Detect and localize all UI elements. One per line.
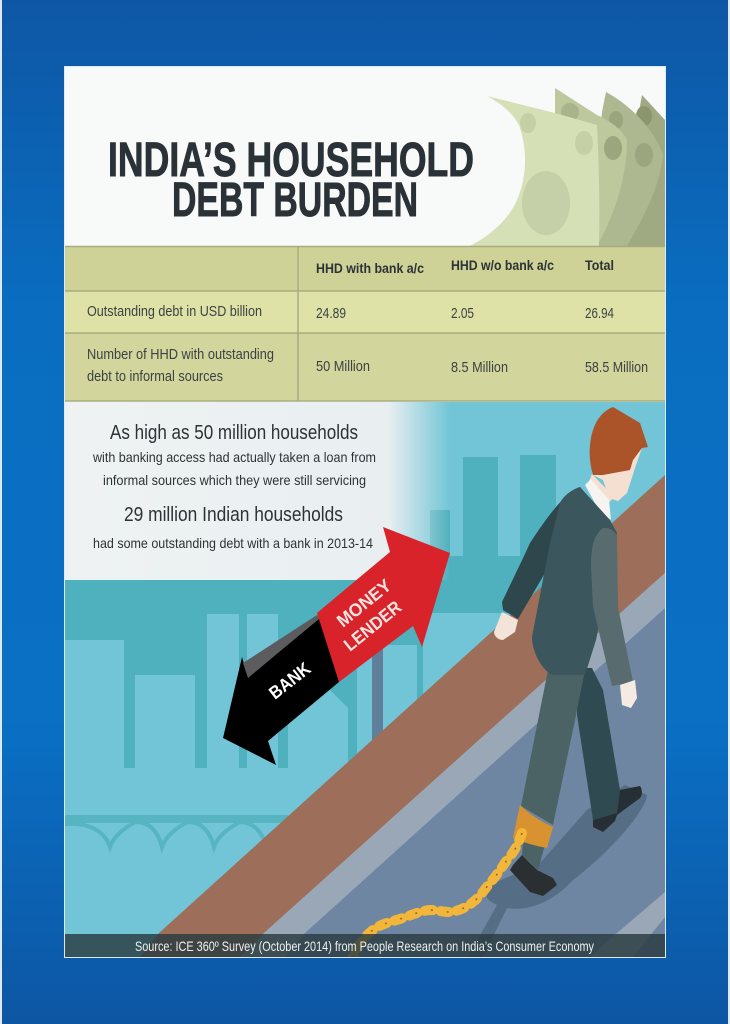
- table row: outstanding debt: [87, 303, 614, 322]
- text backdrop: [65, 402, 450, 580]
- rear leg: [577, 668, 620, 820]
- table header row: HHD with bank a/c: [316, 260, 424, 276]
- statement: 50 million households: informal sources which they were still servicing: [103, 472, 366, 488]
- table row: households with informal debt: debt to informal sources: [87, 368, 223, 385]
- background skyline: [65, 455, 560, 768]
- slope: road: [285, 608, 665, 957]
- statement: 29 million households: had some outstanding debt with a bank in 2013-14: [93, 535, 373, 551]
- front shoe: [510, 855, 557, 896]
- front ankle: [522, 840, 545, 870]
- arrow shadow stripe: [243, 615, 320, 678]
- jacket: [532, 487, 617, 675]
- face: [593, 448, 642, 501]
- man: [494, 407, 648, 896]
- table header row: HHD w/o bank a/c: [451, 257, 554, 273]
- statement: 50 million households: [92, 422, 376, 488]
- road edge stripe: [616, 892, 665, 934]
- debt table: [65, 246, 665, 401]
- table row: outstanding debt: Outstanding debt in USD billion: [87, 303, 262, 320]
- title: [108, 134, 474, 227]
- title: INDIA’S HOUSEHOLD: [108, 134, 474, 187]
- title: DEBT BURDEN: [172, 174, 418, 227]
- illustration scene: [65, 402, 665, 957]
- label: money lender: LENDER: [340, 597, 405, 655]
- slope: grey kerb: [240, 573, 665, 957]
- source bar: [65, 934, 665, 957]
- table row: outstanding debt: 24.89: [316, 305, 346, 322]
- label: bank: BANK: [265, 658, 314, 703]
- statement: 50 million households: As high as 50 million households: [110, 422, 358, 444]
- front hand: [620, 680, 637, 708]
- table row: households with informal debt: [87, 346, 648, 385]
- rear shoe: [593, 786, 642, 832]
- statement: 29 million households: [93, 504, 373, 551]
- statement: 29 million households: 29 million Indian households: [124, 504, 343, 526]
- label: money lender: MONEY: [333, 575, 395, 631]
- statement: 50 million households: with banking access had actually taken a loan from: [92, 449, 376, 465]
- man's shadow: [481, 785, 647, 934]
- front arm: [591, 528, 633, 686]
- rear hand: [494, 612, 518, 640]
- neck: [589, 474, 612, 502]
- bridge: [65, 819, 288, 847]
- table header row: [316, 257, 614, 276]
- source bar: Source: ICE 360º Survey (October 2014) from People Research on India’s Consumer Economy: [135, 938, 594, 954]
- label: money lender: [336, 578, 402, 652]
- hair: [590, 407, 648, 475]
- arrow: bank: [223, 618, 339, 765]
- shirt collar: [585, 479, 611, 520]
- leg chain: [353, 833, 522, 957]
- table row: outstanding debt: 26.94: [585, 305, 614, 322]
- table row: outstanding debt: 2.05: [451, 305, 474, 322]
- rear arm: [502, 487, 580, 619]
- ankle cuff: [513, 805, 553, 848]
- arrow: money lender: [317, 527, 450, 682]
- header: banknotes illustration: [470, 88, 665, 246]
- table row: households with informal debt: Number of HHD with outstanding: [87, 346, 274, 363]
- front leg: [521, 670, 585, 825]
- slope: brown wall: [140, 475, 665, 957]
- table header row: Total: [585, 257, 614, 273]
- table row: households with informal debt: 50 Million: [316, 358, 370, 375]
- table row: households with informal debt: 8.5 Million: [451, 359, 508, 376]
- table row: households with informal debt: 58.5 Million: [585, 359, 648, 376]
- direction sign: [223, 527, 450, 765]
- main panel: [64, 66, 666, 958]
